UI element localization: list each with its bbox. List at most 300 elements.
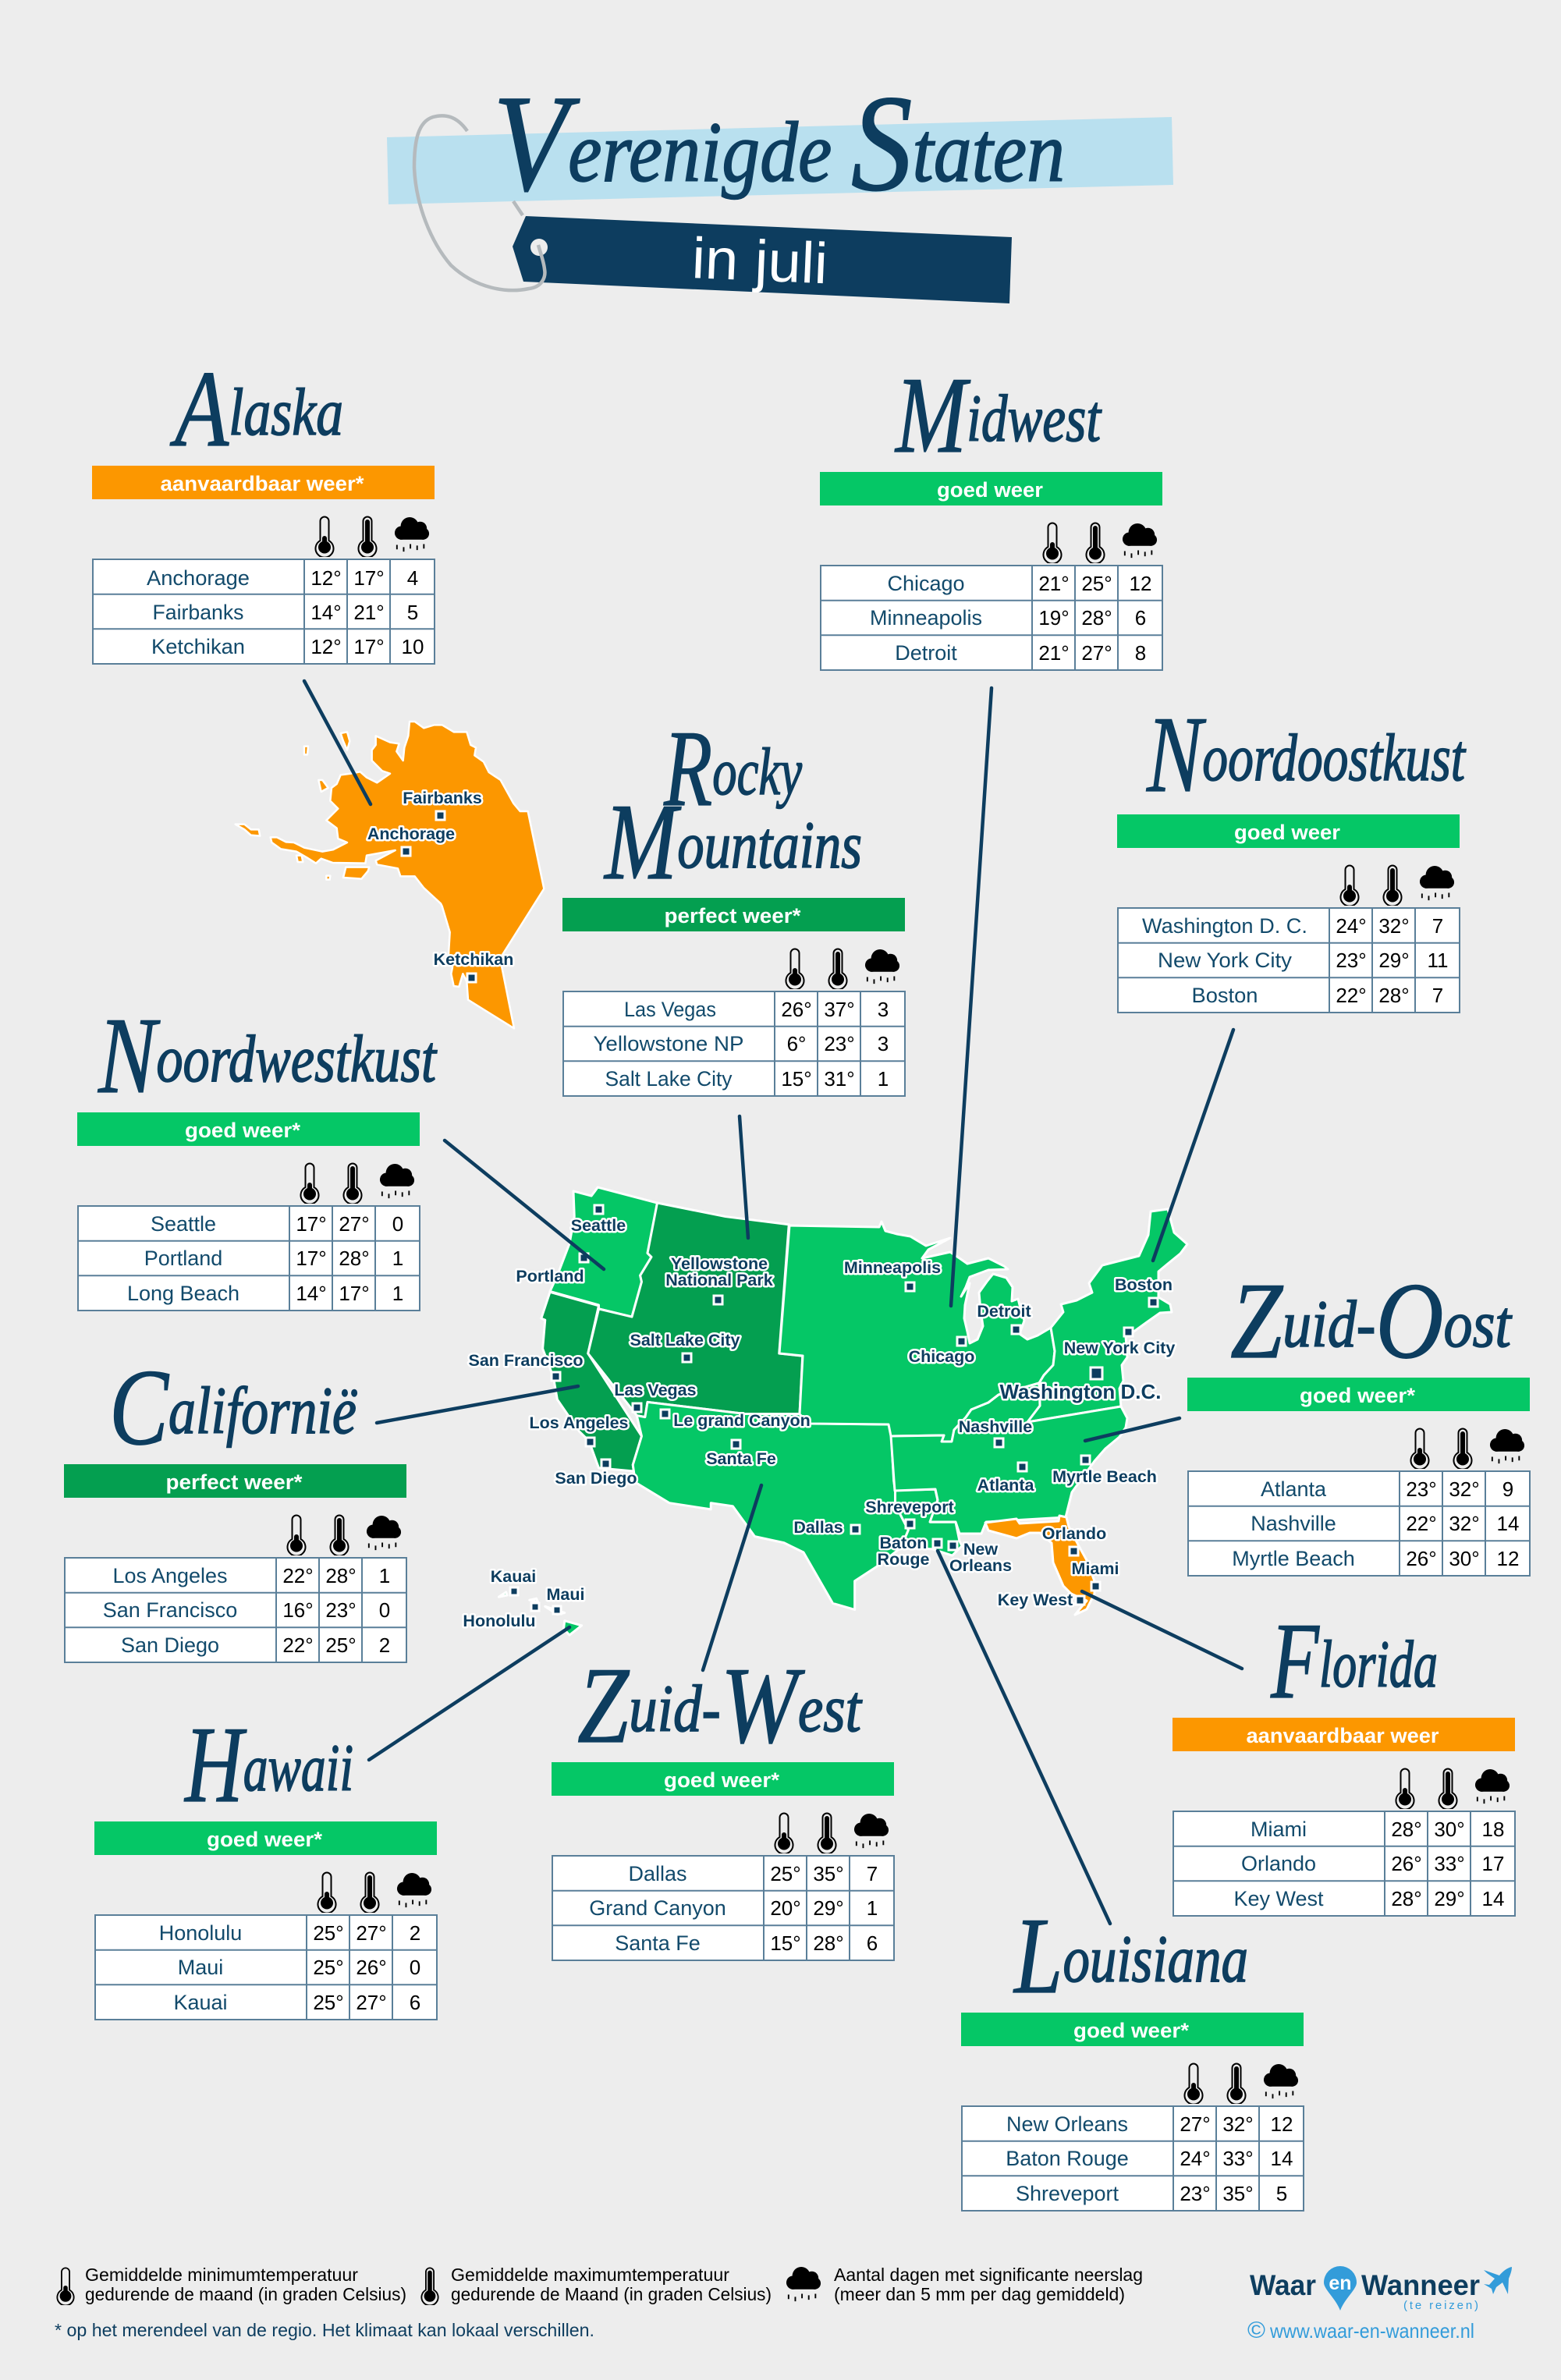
table: cities: 35°: [813, 1862, 844, 1885]
table: cities: 5: [407, 601, 418, 624]
icons: table header: [786, 949, 899, 990]
table: cities: Dallas: [628, 1862, 687, 1885]
map: eastern states: [779, 1209, 1187, 1615]
city labels: Atlanta: [977, 1476, 1034, 1495]
city labels: Le grand Canyon: [673, 1411, 811, 1430]
title text: taten: [913, 105, 1065, 200]
banner: weather rating: [77, 1112, 420, 1146]
table: cities: 15°: [770, 1931, 801, 1955]
table: cities: 28°: [1391, 1887, 1422, 1910]
region: Rocky Mountains: [588, 1203, 803, 1417]
table: cities: Nashville: [1251, 1512, 1336, 1535]
city labels: Orleans: [949, 1556, 1012, 1575]
city markers: [402, 811, 1158, 1614]
table: cities: 9: [1502, 1477, 1513, 1501]
map: [236, 681, 1242, 1924]
city labels: Kauai: [491, 1567, 536, 1586]
banner: weather rating: [64, 1464, 406, 1498]
city labels: Anchorage: [367, 825, 455, 843]
subtitle text: in juli: [690, 225, 829, 296]
logo text: en: [1329, 2272, 1352, 2294]
heading: Louisiana: ouisiana: [1063, 1921, 1248, 1996]
heading: Rocky Mountains: ocky: [712, 734, 803, 809]
banner: weather rating: [820, 472, 1162, 505]
table: cities: [1118, 908, 1460, 1013]
table: cities: 29°: [813, 1896, 844, 1920]
table: cities: 1: [867, 1896, 878, 1920]
table: cities: 24°: [1336, 914, 1367, 938]
footnote: * op het merendeel van de regio. Het klimaat kan lokaal verschillen.: [55, 2320, 594, 2340]
table: cities: 23°: [1336, 949, 1367, 972]
table: cities: 31°: [824, 1067, 855, 1091]
table: cities: [78, 1206, 420, 1311]
table: cities: 17°: [296, 1212, 327, 1236]
city labels: Ketchikan: [434, 950, 513, 969]
table: cities: 17: [1482, 1852, 1504, 1875]
table: cities: 25°: [1081, 572, 1112, 595]
table: cities: 27°: [356, 1991, 387, 2014]
region: Midwest: [779, 1222, 1055, 1442]
region: Hawaii: [498, 1592, 582, 1635]
table: cities: 19°: [1038, 606, 1070, 630]
table: cities: 28°: [339, 1247, 370, 1270]
table: cities: 28°: [325, 1564, 357, 1587]
heading: Louisiana: L: [1013, 1896, 1063, 2016]
table: cities: 32°: [1449, 1477, 1480, 1501]
banner: weather rating: aanvaardbaar weer: [1247, 1724, 1439, 1747]
table: cities: 7: [1432, 984, 1443, 1007]
banner: weather rating: [552, 1762, 894, 1796]
table: cities: Fairbanks: [153, 601, 243, 624]
table: cities: [563, 991, 905, 1096]
table: cities: 17°: [353, 566, 385, 590]
table: cities: [93, 559, 435, 664]
table: cities: Anchorage: [147, 566, 250, 590]
icons: table header: [1340, 866, 1454, 906]
city labels: Dallas: [793, 1518, 843, 1537]
city labels: San Francisco: [469, 1351, 583, 1370]
table: cities: 27°: [356, 1921, 387, 1945]
banner: weather rating: [94, 1821, 437, 1855]
logo tagline: (te reizen): [1403, 2299, 1478, 2312]
table: cities: 26°: [1406, 1547, 1437, 1570]
panel: Hawaii: [94, 1704, 437, 2020]
heading: Midwest: idwest: [967, 381, 1102, 456]
table: cities: [552, 1856, 894, 1960]
table: cities: 1: [392, 1282, 403, 1305]
region: California: [541, 1292, 641, 1471]
banner: weather rating: [92, 466, 435, 499]
table: cities: 27°: [1081, 641, 1112, 665]
heading: Rocky Mountains: [603, 708, 862, 903]
banner: weather rating: perfect weer*: [165, 1470, 303, 1494]
table: cities: 24°: [1180, 2147, 1211, 2170]
city labels: National Park: [665, 1271, 773, 1289]
region: Noordoostkust: [1027, 1209, 1187, 1422]
region: Louisiana: [896, 1489, 962, 1555]
city labels: Portland: [516, 1267, 584, 1286]
table: cities: 14: [1497, 1512, 1519, 1535]
banner: weather rating: [1173, 1718, 1515, 1751]
table: cities: Key West: [1233, 1887, 1324, 1910]
legend text: maximum temperature: gedurende de Maand (in graden Celsius): [451, 2284, 772, 2304]
table: cities: 29°: [1434, 1887, 1465, 1910]
heading: Florida: F: [1270, 1601, 1320, 1722]
title text: erenigde: [568, 105, 851, 200]
logo text: Waar: [1250, 2269, 1316, 2301]
heading: Rocky Mountains: R: [663, 708, 712, 829]
city labels: Myrtle Beach: [1052, 1467, 1157, 1486]
city labels: Chicago: [909, 1347, 974, 1366]
title block: [387, 67, 1173, 303]
table: cities: 21°: [1038, 572, 1070, 595]
table: cities: 18: [1482, 1818, 1504, 1841]
heading: Noordoostkust: oordoostkust: [1202, 720, 1467, 795]
icons: table header: [315, 516, 429, 558]
banner: weather rating: goed weer*: [1073, 2019, 1190, 2042]
table: cities: 27°: [339, 1212, 370, 1236]
banner: weather rating: [1117, 814, 1460, 848]
table: cities: 37°: [824, 998, 855, 1021]
table: cities: 30°: [1449, 1547, 1480, 1570]
heading: Noordwestkust: N: [97, 995, 161, 1116]
logo text: [1250, 2269, 1480, 2301]
region: Zuid-West: [633, 1402, 908, 1609]
table: cities: Seattle: [151, 1212, 216, 1236]
table: cities: 33°: [1434, 1852, 1465, 1875]
legend text: maximum temperature: Gemiddelde maximumtemperatuur: [451, 2265, 729, 2285]
city labels: New: [963, 1540, 998, 1559]
region: Noordwestkust: [550, 1187, 657, 1317]
logo: Waar en Wanneer: [1250, 2266, 1512, 2312]
table: cities: 16°: [282, 1598, 314, 1622]
table: cities: 27°: [1180, 2112, 1211, 2136]
table: cities: 6°: [787, 1032, 806, 1055]
region: Florida: [985, 1516, 1094, 1615]
city labels: Detroit: [977, 1302, 1031, 1321]
table: cities: 17°: [339, 1282, 370, 1305]
table: cities: [95, 1915, 437, 2020]
table: cities: 5: [1276, 2182, 1287, 2205]
legend text: minimum temperature: [85, 2265, 406, 2304]
table: cities: Boston: [1192, 984, 1258, 1007]
city labels: San Diego: [555, 1469, 637, 1488]
banner: weather rating: goed weer*: [664, 1768, 780, 1792]
table: cities: Honolulu: [159, 1921, 242, 1945]
table: cities: 6: [1135, 606, 1146, 630]
table: cities: Portland: [144, 1247, 222, 1270]
table: cities: 2: [410, 1921, 420, 1945]
table: cities: Shreveport: [1016, 2182, 1119, 2205]
table: cities: Detroit: [895, 641, 957, 665]
legend text: minimum temperature: gedurende de maand (in graden Celsius): [85, 2284, 406, 2304]
table: cities: 28°: [1378, 984, 1410, 1007]
table: cities: Long Beach: [127, 1282, 239, 1305]
legend text: maximum temperature: [451, 2265, 772, 2304]
table: cities: 28°: [813, 1931, 844, 1955]
table: cities: Myrtle Beach: [1232, 1547, 1355, 1570]
table: cities: 10: [402, 635, 424, 658]
city labels: Honolulu: [463, 1612, 536, 1630]
city labels: New York City: [1064, 1339, 1175, 1357]
icons: table header: [1396, 1769, 1510, 1810]
banner: weather rating: goed weer*: [207, 1828, 323, 1851]
table: cities: 12°: [310, 635, 342, 658]
website link: www.waar-en-wanneer.nl: [1269, 2319, 1474, 2343]
city labels: Rouge: [878, 1550, 929, 1569]
table: cities: 3: [878, 998, 889, 1021]
panel: Noordwestkust: [77, 995, 438, 1311]
table: cities: 7: [1432, 914, 1443, 938]
table: cities: Yellowstone NP: [593, 1032, 744, 1055]
icon: maximum temperature: [421, 2268, 438, 2305]
heading: Zuid-Oost: uid-: [1283, 1286, 1375, 1361]
heading: Zuid-West: est: [798, 1671, 863, 1746]
table: cities: 14°: [296, 1282, 327, 1305]
table: cities: Minneapolis: [870, 606, 982, 630]
table: cities: Ketchikan: [151, 635, 245, 658]
table: cities: 32°: [1449, 1512, 1480, 1535]
table: cities: 14: [1482, 1887, 1504, 1910]
table: cities: 21°: [353, 601, 385, 624]
table: cities: 29°: [1378, 949, 1410, 972]
logo text: Wanneer: [1361, 2269, 1480, 2301]
table: cities: Kauai: [173, 1991, 228, 2014]
icons: table header: [1184, 2064, 1298, 2105]
table: cities: [1173, 1811, 1515, 1916]
heading: Rocky Mountains: M: [603, 782, 682, 903]
heading: Alaska: A: [170, 349, 229, 470]
banner: weather rating: goed weer*: [185, 1119, 301, 1142]
table: cities: 14: [1271, 2147, 1293, 2170]
heading: Alaska: laska: [229, 374, 343, 449]
city labels: Las Vegas: [614, 1381, 697, 1399]
table: cities: 25°: [770, 1862, 801, 1885]
legend: [57, 2265, 1143, 2305]
legend text: rain days: Aantal dagen met significante neerslag: [834, 2265, 1143, 2285]
banner: weather rating: goed weer: [937, 478, 1043, 502]
banner: weather rating: [1187, 1378, 1530, 1411]
city labels: Orlando: [1042, 1524, 1106, 1543]
table: cities: 1: [392, 1247, 403, 1270]
table: cities: New Orleans: [1006, 2112, 1128, 2136]
heading: Rocky Mountains: ountains: [677, 807, 862, 882]
banner: weather rating: goed weer: [1234, 821, 1340, 844]
legend text: minimum temperature: Gemiddelde minimumtemperatuur: [85, 2265, 358, 2285]
table: cities: 21°: [1038, 641, 1070, 665]
table: cities: 25°: [325, 1633, 357, 1657]
table: cities: 7: [867, 1862, 878, 1885]
city labels: Santa Fe: [706, 1449, 776, 1468]
icons: table header: [1410, 1429, 1524, 1470]
table: cities: Los Angeles: [112, 1564, 228, 1587]
city labels: Miami: [1072, 1559, 1119, 1578]
legend text: rain days: (meer dan 5 mm per dag gemiddeld): [834, 2284, 1125, 2304]
table: cities: [65, 1558, 406, 1662]
heading: Zuid-West: W: [721, 1645, 806, 1766]
table: cities: 25°: [313, 1991, 344, 2014]
heading: Florida: lorida: [1319, 1626, 1438, 1701]
panel: Noordoostkust: [1117, 694, 1467, 1013]
leader lines: [304, 681, 1242, 1924]
table: cities: San Diego: [121, 1633, 219, 1657]
banner: weather rating: perfect weer*: [665, 904, 801, 928]
icons: table header: [301, 1164, 414, 1204]
heading: Midwest: M: [894, 355, 971, 476]
table: cities: 30°: [1434, 1818, 1465, 1841]
table: cities: 6: [867, 1931, 878, 1955]
heading: Zuid-Oost: ost: [1444, 1286, 1513, 1361]
tag: [513, 216, 1012, 303]
city labels: Yellowstone: [671, 1254, 768, 1273]
table: cities: 25°: [313, 1921, 344, 1945]
icons: table header: [287, 1515, 401, 1556]
panel: Alaska: [92, 349, 435, 664]
heading: Noordoostkust: N: [1145, 694, 1206, 815]
table: cities: 33°: [1222, 2147, 1254, 2170]
tag string: [414, 115, 545, 290]
heading: Californië: alifornië: [169, 1373, 357, 1448]
table: cities: Santa Fe: [615, 1931, 701, 1955]
table: cities: Chicago: [887, 572, 965, 595]
table: cities: 25°: [313, 1956, 344, 1979]
region: Zuid-Oost: [891, 1383, 1127, 1534]
city labels: Fairbanks: [403, 789, 482, 807]
table: cities: 0: [410, 1956, 420, 1979]
icons: table header: [318, 1872, 431, 1914]
table: cities: 12°: [310, 566, 342, 590]
table: cities: 17°: [296, 1247, 327, 1270]
city labels: Boston: [1115, 1275, 1173, 1294]
banner: weather rating: [562, 898, 905, 931]
table: cities: 14°: [310, 601, 342, 624]
panel: Rocky Mountains: [562, 708, 905, 1096]
city labels: Key West: [998, 1591, 1073, 1609]
heading: Zuid-West: Z: [577, 1645, 630, 1766]
table: cities: 22°: [1336, 984, 1367, 1007]
table: cities: 3: [878, 1032, 889, 1055]
legend text: rain days: [834, 2265, 1143, 2304]
table: cities: 2: [379, 1633, 390, 1657]
table: cities: 35°: [1222, 2182, 1254, 2205]
table: cities: Maui: [178, 1956, 223, 1979]
map: western and southern states: [498, 1187, 962, 1635]
table: cities: 22°: [1406, 1512, 1437, 1535]
table: cities: 20°: [770, 1896, 801, 1920]
table: cities: 17°: [353, 635, 385, 658]
table: cities: 4: [407, 566, 418, 590]
logo pin: [1324, 2266, 1357, 2311]
heading: Zuid-West: uid-: [629, 1671, 721, 1746]
table: cities: 22°: [282, 1564, 314, 1587]
city labels: Minneapolis: [844, 1258, 941, 1277]
table: cities: 32°: [1378, 914, 1410, 938]
heading: Californië: C: [109, 1347, 169, 1468]
icon: minimum temperature: [57, 2268, 74, 2305]
panel: Louisiana: [961, 1896, 1304, 2211]
heading: Hawaii: H: [184, 1704, 247, 1825]
city labels: Salt Lake City: [630, 1331, 740, 1350]
map: Alaska: [236, 722, 544, 1028]
table: cities: 12: [1497, 1547, 1519, 1570]
table: cities: 8: [1135, 641, 1146, 665]
table: cities: Baton Rouge: [1006, 2147, 1129, 2170]
city labels: Maui: [547, 1585, 584, 1604]
city labels: Seattle: [571, 1216, 626, 1235]
icons: table header: [775, 1813, 889, 1854]
city labels: Washington D.C.: [999, 1380, 1162, 1403]
website link: ©: [1247, 2318, 1265, 2343]
city labels: Baton: [880, 1534, 927, 1552]
table: cities: 23°: [824, 1032, 855, 1055]
table: cities: [962, 2106, 1304, 2211]
table: cities: 32°: [1222, 2112, 1254, 2136]
table: cities: 26°: [781, 998, 812, 1021]
banner: weather rating: aanvaardbaar weer*: [161, 472, 364, 495]
icons: table header: [1044, 523, 1157, 564]
title text: V: [493, 67, 580, 220]
table: cities: New York City: [1158, 949, 1292, 972]
city labels: Shreveport: [865, 1498, 954, 1516]
city labels: Los Angeles: [529, 1413, 629, 1432]
table: cities: 12: [1130, 572, 1151, 595]
table: cities: Salt Lake City: [605, 1067, 733, 1091]
table: cities: Grand Canyon: [589, 1896, 726, 1920]
table: cities: Miami: [1251, 1818, 1307, 1841]
table: cities: 26°: [1391, 1852, 1422, 1875]
table: cities: Las Vegas: [624, 998, 716, 1021]
icon: plane: [1484, 2267, 1512, 2294]
table: cities: 1: [379, 1564, 390, 1587]
banner: weather rating: goed weer*: [1300, 1384, 1416, 1407]
table: cities: 28°: [1081, 606, 1112, 630]
table: cities: Washington D. C.: [1142, 914, 1307, 938]
table: cities: [1188, 1471, 1530, 1576]
heading: Zuid-Oost: O: [1375, 1261, 1444, 1382]
panel: Californië: [64, 1347, 406, 1662]
panel: Zuid-Oost: [1187, 1261, 1530, 1576]
table: cities: San Francisco: [103, 1598, 237, 1622]
tag hole: [530, 239, 548, 256]
heading: Zuid-Oost: Z: [1230, 1261, 1284, 1382]
title band: [387, 117, 1173, 204]
table: cities: Orlando: [1241, 1852, 1316, 1875]
table: cities: 0: [379, 1598, 390, 1622]
title text: S: [851, 67, 913, 220]
table: cities: 26°: [356, 1956, 387, 1979]
heading: Noordwestkust: oordwestkust: [156, 1021, 438, 1096]
city labels: [367, 789, 1175, 1630]
table: cities: 23°: [325, 1598, 357, 1622]
panel: Florida: [1173, 1601, 1515, 1916]
table: cities: 11: [1428, 949, 1448, 972]
panel: Zuid-West: [552, 1645, 894, 1960]
table: cities: 1: [878, 1067, 889, 1091]
table: cities: 28°: [1391, 1818, 1422, 1841]
table: cities: 12: [1271, 2112, 1293, 2136]
icon: rain days: [786, 2267, 821, 2301]
heading: Hawaii: awaii: [243, 1730, 353, 1805]
table: cities: [821, 566, 1162, 670]
banner: weather rating: [961, 2013, 1304, 2046]
table: cities: 15°: [781, 1067, 812, 1091]
table: cities: 23°: [1180, 2182, 1211, 2205]
table: cities: 22°: [282, 1633, 314, 1657]
table: cities: 6: [410, 1991, 420, 2014]
table: cities: 23°: [1406, 1477, 1437, 1501]
city labels: Nashville: [959, 1417, 1032, 1436]
table: cities: Atlanta: [1261, 1477, 1327, 1501]
